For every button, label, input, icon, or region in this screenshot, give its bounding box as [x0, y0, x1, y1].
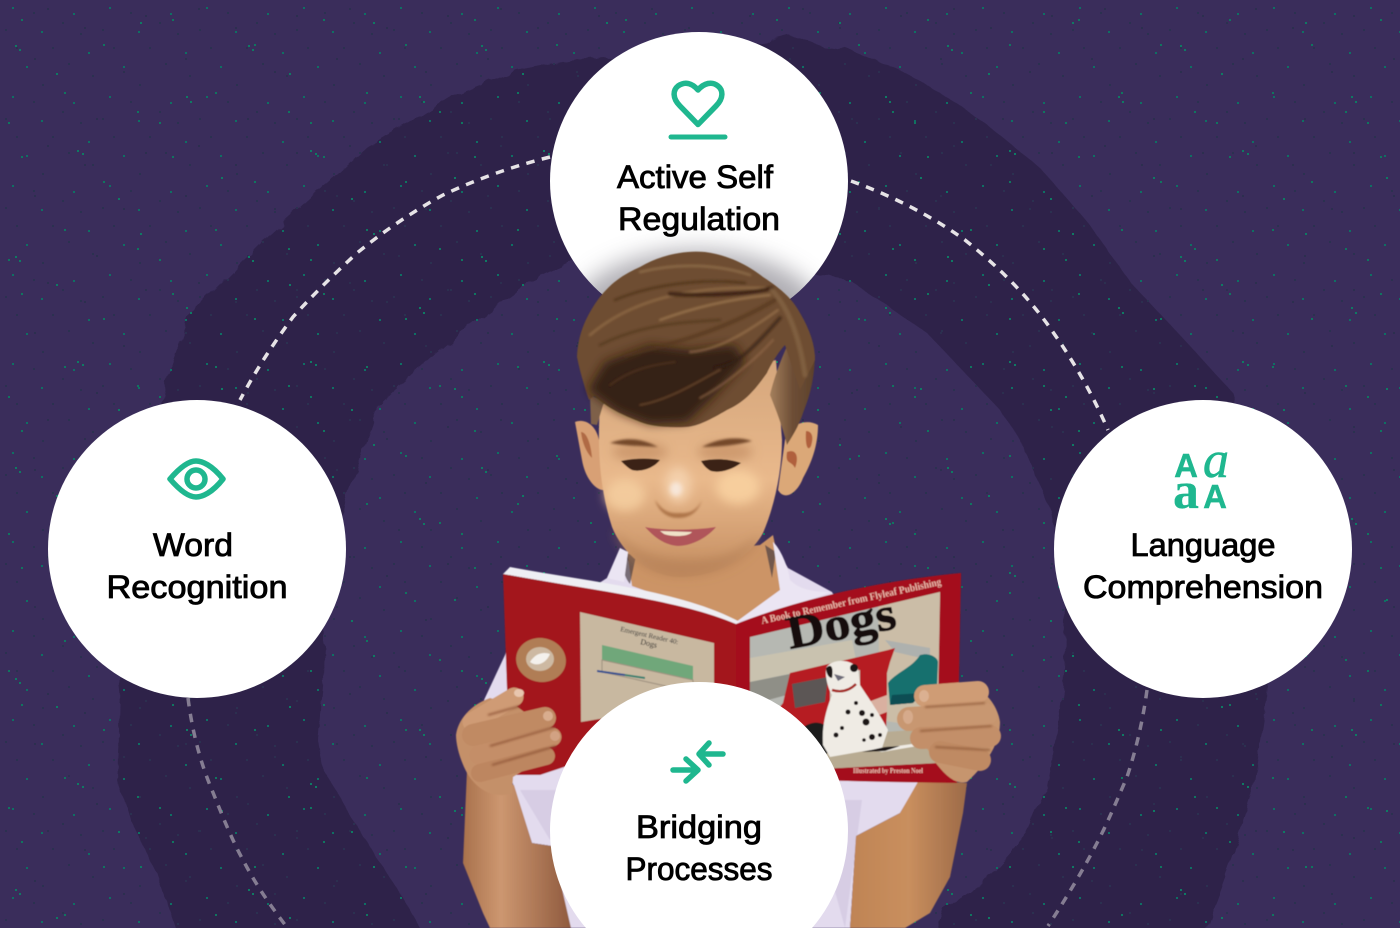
- book: blurb panel: Emergent Reader 40:: [620, 625, 679, 646]
- circle: language comprehension: [1054, 400, 1352, 698]
- label: active self regulation: Active Self: [617, 159, 773, 195]
- book: cover artwork: [745, 585, 945, 775]
- label: Language: [1130, 527, 1276, 563]
- soft shadow of the head on the circle: [582, 236, 814, 299]
- icon: eye: [170, 461, 223, 497]
- label: Bridging: [636, 809, 762, 845]
- circle: active self regulation: [550, 32, 848, 300]
- eyebrows: [610, 438, 752, 447]
- face: [599, 360, 782, 577]
- book: back cover: [503, 574, 750, 775]
- hair strands: [590, 266, 805, 405]
- hair side fade: [770, 340, 815, 445]
- left hand: [456, 689, 560, 795]
- icon: letter forms: a: [1173, 463, 1199, 520]
- book: tagline: A Book to Remember from Flyleaf Publishing: [760, 577, 943, 627]
- hair dark front: [588, 345, 745, 424]
- book: dalmatian: [823, 661, 918, 757]
- icon: letter forms: A: [1174, 447, 1198, 484]
- icon: letter forms: a: [1203, 432, 1229, 489]
- nose: [655, 500, 702, 518]
- label: Processes: [626, 851, 772, 887]
- left arm: [463, 770, 571, 928]
- right hand: [903, 683, 1000, 783]
- book: blurb panel: [580, 612, 714, 722]
- label: active self regulation: Regulation: [618, 201, 780, 237]
- book: badge: [513, 634, 569, 686]
- cheek highlights and shading: [605, 442, 762, 577]
- icon: heart on line: [671, 83, 725, 137]
- right arm: [850, 780, 967, 928]
- ears: [575, 421, 606, 490]
- collar: [607, 542, 830, 622]
- book: pages edge: [503, 567, 740, 627]
- label: Word: [153, 527, 233, 563]
- neck: [626, 535, 786, 622]
- circle: bridging processes: [550, 682, 848, 928]
- circle: word recognition: [48, 400, 346, 698]
- mouth: [645, 527, 716, 546]
- textured dark ring: [118, 35, 1268, 928]
- eyes: [621, 459, 741, 472]
- book: front cover: [736, 573, 961, 783]
- icon: converging arrows: [673, 743, 723, 781]
- label: Recognition: [106, 569, 288, 605]
- hair: [577, 252, 815, 427]
- boy reading a book: [456, 252, 1000, 928]
- book: illustrator credit: Illustrated by Preston Noel: [853, 767, 923, 775]
- icon: letter forms: [1173, 432, 1229, 520]
- torso and shirt: [484, 542, 919, 928]
- book: blurb panel: Dogs: [640, 637, 658, 650]
- dashed connector ring: [188, 157, 1147, 926]
- label: Comprehension: [1083, 569, 1323, 605]
- icon: letter forms: A: [1203, 478, 1227, 515]
- book: title: Dogs: [782, 588, 900, 660]
